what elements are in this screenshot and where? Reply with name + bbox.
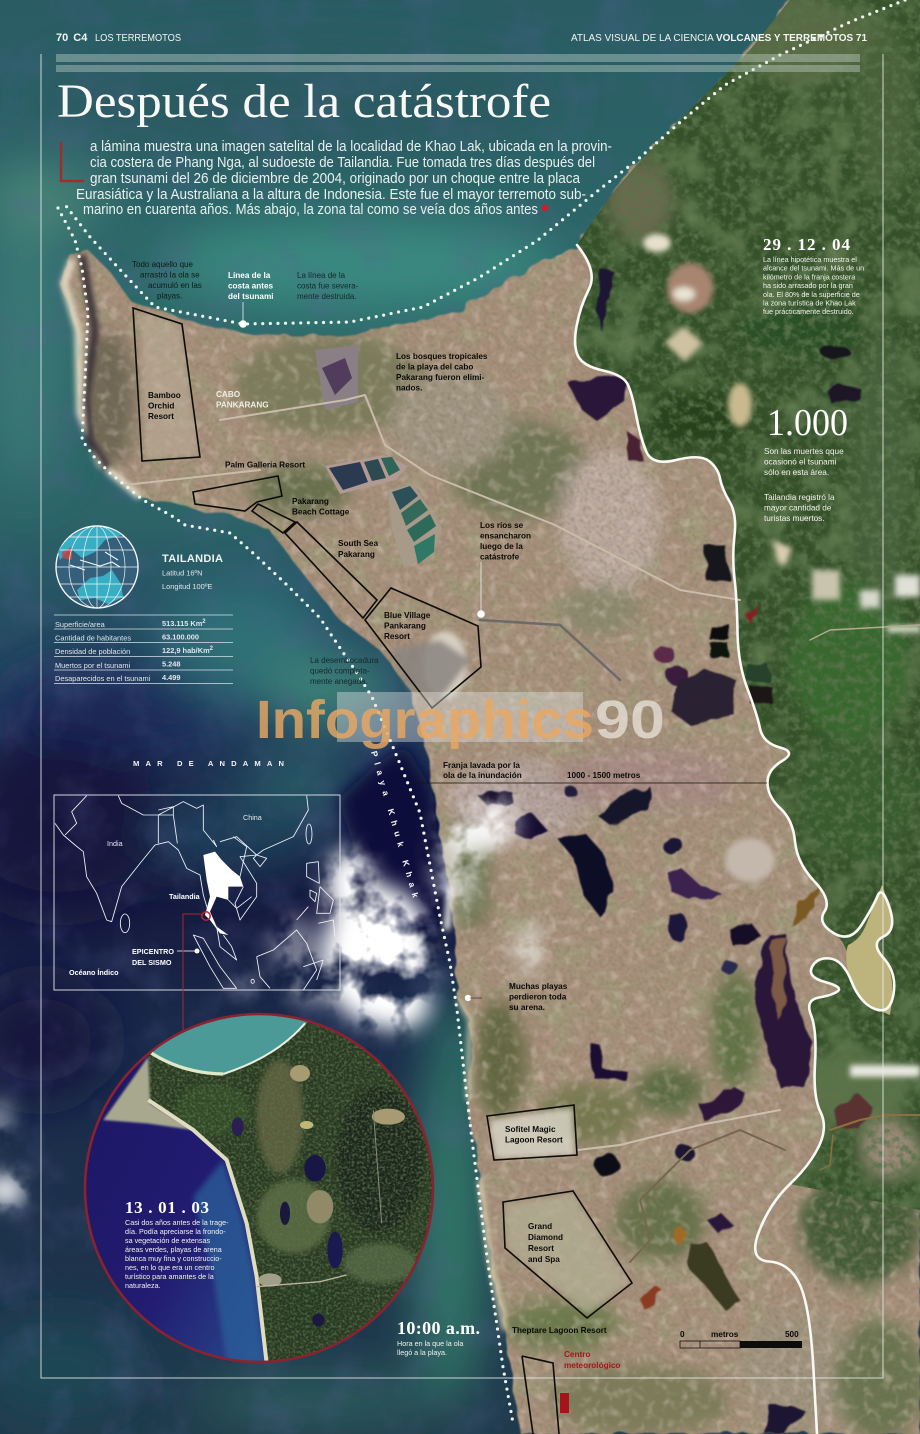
sea label: MAR DE ANDAMAN xyxy=(133,759,284,768)
time callout xyxy=(397,1318,480,1357)
inset lagoons and fields xyxy=(304,1155,326,1182)
roads and rivers xyxy=(125,395,920,1262)
label: Bamboo Orchid Resort: Orchid xyxy=(148,402,174,410)
data table: 5.248 xyxy=(162,660,180,668)
annotation: river mouth: mente anegada. xyxy=(310,677,368,686)
label: Grand Diamond: and Spa xyxy=(528,1255,560,1264)
label: Sofitel: Sofitel Magic xyxy=(505,1125,556,1134)
label: weather centre: meteorológico xyxy=(564,1361,620,1370)
annotation: destroyed coast: La línea de la xyxy=(297,271,346,280)
data table: 122,9 hab/Km xyxy=(162,646,210,655)
data table: Muertos por el tsunami xyxy=(55,661,131,670)
date callout: 29.12.04: 29 . 12 . 04 xyxy=(763,235,850,254)
intro paragraph: gran tsunami del 26 de diciembre de 2004, originado por un choque entre la placa xyxy=(90,171,581,187)
label: Palm Galleria Resort: Palm Galleria Resort xyxy=(225,460,305,470)
label: Bamboo Orchid Resort: Resort xyxy=(148,412,174,421)
label: Blue Village Pankarang Resort: Resort xyxy=(384,632,410,641)
location map xyxy=(54,795,340,1030)
country heading: Latitud 16ºN xyxy=(162,568,203,578)
label: South Sea Pakarang: South Sea xyxy=(338,539,378,548)
annotation: debris: playas. xyxy=(157,292,182,300)
data table: 513.115 Km xyxy=(162,619,202,628)
label: Cabo Pankarang: PANKARANG xyxy=(216,400,269,410)
intro paragraph xyxy=(61,139,612,218)
big number callout: turistas muertos. xyxy=(764,514,825,523)
watermark: Infographics xyxy=(256,690,594,750)
time callout: 10:00 a.m. xyxy=(397,1318,480,1338)
date callout: 29.12.04: ha sido arrasado por la gran xyxy=(763,281,853,290)
date callout: 29.12.04 xyxy=(763,235,864,316)
annotation: pre-tsunami coast with marker: Línea de la xyxy=(228,271,271,280)
label: Blue Village Pankarang Resort: Pankarang xyxy=(384,622,426,630)
label: Blue Village Pankarang Resort: Blue Village xyxy=(384,611,431,620)
label: Theptare: Theptare Lagoon Resort xyxy=(512,1326,607,1335)
big number callout: sólo en esta área. xyxy=(764,468,829,477)
big number callout: 1.000 xyxy=(767,402,848,444)
annotation: beaches with marker: Muchas playas xyxy=(509,982,568,991)
sparse vegetation patches xyxy=(85,330,920,1434)
intro paragraph: marino en cuarenta años. Más abajo, la zona tal como se veía dos años antes xyxy=(83,202,538,218)
beach label: Playa Khuk Khak xyxy=(369,750,421,899)
end mark xyxy=(542,205,548,211)
intro paragraph: Eurasiática y la Australiana a la altura de Indonesia. Este fue el mayor terremoto sub- xyxy=(76,187,586,203)
title: Después de la catástrofe xyxy=(57,75,551,128)
time callout: Hora en la que la ola xyxy=(397,1339,463,1348)
inset open sea xyxy=(86,1056,264,1361)
header bars xyxy=(56,54,860,72)
time callout: llegó a la playa. xyxy=(397,1348,447,1357)
shrimp ponds xyxy=(315,345,442,568)
location map: Océano Índico xyxy=(69,968,119,977)
clouds xyxy=(0,795,548,1206)
scale bar: 500 xyxy=(785,1330,799,1339)
date callout: 29.12.04: ola. El 80% de la superficie de xyxy=(763,290,860,299)
date callout: 29.12.04: kilómetro de la franja costera xyxy=(763,272,855,281)
date callout: 29.12.04: la zona turística de Khao Lak xyxy=(763,298,856,308)
annotation: rivers with marker: Los ríos se xyxy=(480,521,524,530)
label: South Sea Pakarang: Pakarang xyxy=(338,550,375,559)
scale bar: metros xyxy=(711,1330,739,1339)
big number callout: ocasionó el tsunami xyxy=(764,458,837,466)
big number callout xyxy=(764,402,848,523)
header section name: LOS TERREMOTOS xyxy=(95,33,181,44)
Thailand xyxy=(203,852,243,935)
big number callout: mayor cantidad de xyxy=(764,504,832,512)
annotation: rivers with marker: catástrofe xyxy=(480,552,520,562)
inset caption: turístico para amantes de la xyxy=(125,1272,214,1281)
scale bar xyxy=(680,1330,802,1348)
inset caption: sa vegetación de extensas xyxy=(125,1236,211,1245)
epicentre marker xyxy=(177,948,200,954)
intro paragraph: cia costera de Phang Nga, al sudoeste de Tailandia. Fue tomada tres días después del xyxy=(90,155,595,171)
annotation: washed strip: Franja lavada por la xyxy=(443,761,520,770)
dark deep water off Playa Khuk Khak xyxy=(338,745,447,925)
Asia coastlines xyxy=(55,823,208,922)
inset caption: áreas verdes, playas de arena xyxy=(125,1245,222,1254)
locator leader xyxy=(183,912,210,1030)
annotation: river mouth: La desembocadura xyxy=(310,656,379,665)
data table: Densidad de población xyxy=(55,647,130,656)
annotation: washed strip: ola de la inundación xyxy=(443,771,522,780)
location map: EPICENTRO xyxy=(132,947,174,956)
data table: Superficie/area xyxy=(55,620,106,629)
sea colour variation xyxy=(0,50,560,1430)
inset bay xyxy=(150,1015,308,1074)
annotation: rivers with marker: ensancharon xyxy=(480,532,531,540)
annotation: washed strip: 1000 - 1500 metros xyxy=(567,771,641,780)
annotation: beaches with marker xyxy=(465,982,568,1012)
location map: China xyxy=(243,813,262,822)
annotation: washed strip xyxy=(415,761,767,783)
header left: 70 C4 xyxy=(56,32,88,44)
label: Grand Diamond: Diamond xyxy=(528,1233,563,1242)
data table: 2 xyxy=(210,646,214,652)
label: Cabo Pankarang: CABO xyxy=(216,390,241,399)
inset caption: día. Podía apreciarse la frondo- xyxy=(125,1227,226,1236)
data table: Desaparecidos en el tsunami xyxy=(55,674,151,683)
intro paragraph: a lámina muestra una imagen satelital de la localidad de Khao Lak, ubicada en la provin- xyxy=(90,139,612,155)
label: Sofitel: Lagoon Resort xyxy=(505,1136,563,1144)
location map: India xyxy=(107,839,123,848)
annotation: debris: Todo aquello que xyxy=(132,260,193,269)
annotation: forests: Pakarang fueron elimi- xyxy=(396,373,485,382)
annotation: debris: acumuló en las xyxy=(148,281,202,290)
data table: Cantidad de habitantes xyxy=(55,634,131,642)
country heading: TAILANDIA xyxy=(162,553,223,565)
annotation: pre-tsunami coast with marker: costa antes xyxy=(228,282,273,290)
scale bar: 0 xyxy=(680,1330,685,1339)
annotation: beaches with marker: su arena. xyxy=(509,1003,545,1012)
tsunami reach line xyxy=(575,245,894,1434)
continents xyxy=(58,527,122,560)
data table: 2 xyxy=(202,619,206,625)
inset caption: Casi dos años antes de la trage- xyxy=(125,1218,229,1227)
inset caption: naturaleza. xyxy=(125,1281,161,1290)
map border xyxy=(54,795,340,990)
label: Bamboo Orchid Resort: Bamboo xyxy=(148,391,181,400)
annotation: forests: de la playa del cabo xyxy=(396,362,473,372)
label: Grand Diamond: Grand xyxy=(528,1222,552,1231)
yellow clearing xyxy=(846,885,892,1015)
header right: ATLAS VISUAL DE LA CIENCIA VOLCANES Y TERREMOTOS 71 xyxy=(571,33,867,44)
label: weather centre: Centro xyxy=(564,1350,590,1359)
label: Grand Diamond: Resort xyxy=(528,1244,554,1253)
watermark: 90 xyxy=(595,690,665,750)
globe icon xyxy=(56,526,138,608)
data table: 4.499 xyxy=(162,673,180,682)
annotation: forests: nados. xyxy=(396,384,422,392)
date callout: 29.12.04: La línea hipotética muestra el xyxy=(763,255,857,264)
annotation: pre-tsunami coast with marker xyxy=(228,271,274,328)
circle border xyxy=(85,1014,433,1362)
drop cap L xyxy=(61,142,84,181)
annotation: rivers with marker: luego de la xyxy=(480,542,523,551)
annotation: river mouth: quedó completa- xyxy=(310,666,370,676)
lagoons and dark water xyxy=(477,268,875,1434)
annotation: destroyed coast: mente destruida. xyxy=(297,292,357,301)
label: Pakarang Beach Cottage: Pakarang xyxy=(292,497,329,506)
date callout: 29.12.04: fue prácticamente destruido. xyxy=(763,307,854,316)
cleared fields and pale sand patches xyxy=(140,234,920,1330)
country heading xyxy=(162,553,223,591)
country heading: Longitud 100ºE xyxy=(162,582,212,591)
inset land xyxy=(148,1022,432,1360)
big number callout: Son las muertes qque xyxy=(764,447,844,456)
inset caption: nes, en lo que era un centro xyxy=(125,1263,215,1272)
inset circle: before the tsunami xyxy=(84,1012,434,1364)
big number callout: Tailandia registró la xyxy=(764,493,835,502)
inset caption: blanca muy fina y construccio- xyxy=(125,1254,222,1263)
cape beach and dark shore vegetation xyxy=(64,255,140,497)
annotation: rivers with marker xyxy=(477,521,531,618)
inland forest xyxy=(576,0,920,1210)
label: Pakarang Beach Cottage: Beach Cottage xyxy=(292,508,350,516)
resort boundaries xyxy=(133,308,632,1434)
data table xyxy=(54,615,233,684)
annotation: beaches with marker: perdieron toda xyxy=(509,992,567,1002)
date callout: 29.12.04: alcance del tsunami. Más de un xyxy=(763,264,864,273)
annotation: forests: Los bosques tropicales xyxy=(396,352,488,361)
annotation: pre-tsunami coast with marker: del tsunami xyxy=(228,292,274,301)
date: 13 . 01 . 03 xyxy=(125,1198,209,1217)
annotation: destroyed coast: costa fue severa- xyxy=(297,282,359,290)
annotation: debris: arrastró la ola se xyxy=(140,270,200,280)
location map: Tailandia xyxy=(169,892,201,901)
location map: DEL SISMO xyxy=(132,958,172,967)
data table: 63.100.000 xyxy=(162,632,199,642)
label: weather centre xyxy=(560,1350,620,1413)
